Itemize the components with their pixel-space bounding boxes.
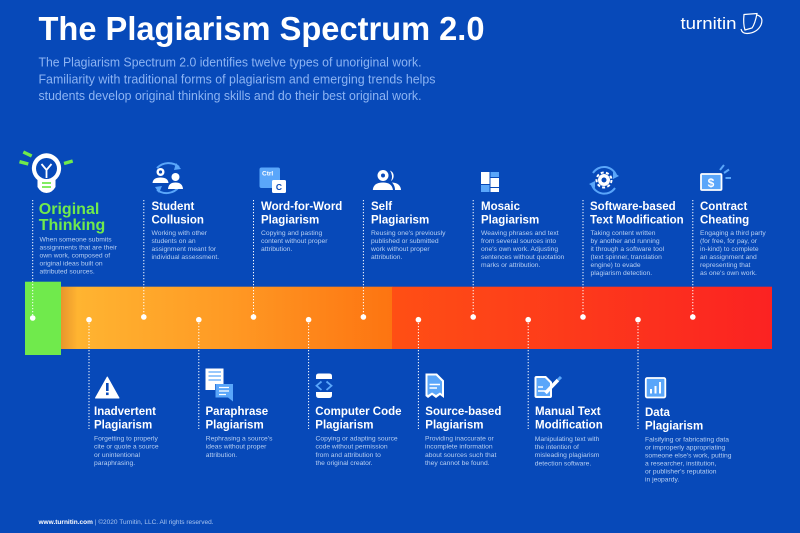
item: Contract Cheating: (for free, for pay, or xyxy=(700,238,758,245)
item: Paraphrase Plagiarism: attribution. xyxy=(206,452,237,459)
item: Computer Code Plagiarism: Computer Code xyxy=(315,406,402,418)
item: Inadvertent Plagiarism xyxy=(94,377,159,467)
icon: ctrl c keys xyxy=(260,168,286,193)
icon: phone with code brackets xyxy=(316,374,332,398)
item: Software-based Text Modification: Taking content written xyxy=(590,230,656,237)
item: Manual Text Modification: the intention of xyxy=(535,444,579,451)
item: Manual Text Modification: misleading plagiarism xyxy=(535,452,600,459)
item: Original Thinking: original ideas built on xyxy=(40,261,103,268)
item: Mosaic Plagiarism: Mosaic xyxy=(481,201,521,213)
title: The Plagiarism Spectrum 2.0 xyxy=(38,10,484,47)
item: Software-based Text Modification: (text spinner, translation xyxy=(590,254,662,261)
item: Original Thinking: Original xyxy=(39,201,99,218)
item: Data Plagiarism: Falsifying or fabricating data xyxy=(645,436,729,443)
item: Source-based Plagiarism: incomplete information xyxy=(425,444,493,451)
item: Data Plagiarism: or publisher's reputation xyxy=(645,468,717,476)
item: Computer Code Plagiarism: Plagiarism xyxy=(315,420,373,432)
intro text: The Plagiarism Spectrum 2.0 identifies twelve types of unoriginal work. xyxy=(38,56,422,70)
item: Student Collusion: students on an xyxy=(152,238,196,245)
item: Contract Cheating: in-kind) to complete xyxy=(700,246,759,253)
item: Computer Code Plagiarism xyxy=(315,374,402,467)
item: Original Thinking: assignments that are their xyxy=(40,245,118,252)
item: Paraphrase Plagiarism xyxy=(206,368,273,459)
item: Contract Cheating: as one's own work. xyxy=(700,270,757,277)
item: Source-based Plagiarism: Providing inaccurate or xyxy=(425,436,494,442)
item: Data Plagiarism: or improperly appropriating xyxy=(645,444,726,452)
item: Inadvertent Plagiarism: paraphrasing. xyxy=(94,460,135,467)
item: Data Plagiarism: Data xyxy=(645,407,671,419)
item: Student Collusion: individual assessment. xyxy=(152,254,219,261)
item: Student Collusion xyxy=(152,163,219,261)
item: Contract Cheating: Contract xyxy=(700,201,747,213)
item: Computer Code Plagiarism: the original creator. xyxy=(316,460,373,467)
item: Student Collusion: Collusion xyxy=(152,214,204,226)
intro text: Familiarity with traditional forms of plagiarism and emerging trends helps xyxy=(38,72,436,86)
item: Software-based Text Modification: it through a software tool xyxy=(590,246,665,253)
item: Contract Cheating: Cheating xyxy=(700,214,749,226)
item: Manual Text Modification: Modification xyxy=(535,420,603,432)
item: Inadvertent Plagiarism: Forgetting to properly xyxy=(94,436,159,442)
item: Manual Text Modification: Manual Text xyxy=(535,406,601,418)
item: Mosaic Plagiarism: one's own work. Adjusting xyxy=(481,246,558,253)
item: Self Plagiarism: work without proper xyxy=(370,246,430,253)
item: Data Plagiarism xyxy=(645,378,732,484)
item: Paraphrase Plagiarism: ideas without proper xyxy=(206,444,267,451)
icon: ctrl c keys: Ctrl xyxy=(262,170,273,178)
item: Paraphrase Plagiarism: Plagiarism xyxy=(206,420,264,432)
item: Original Thinking: When someone submits xyxy=(40,237,112,244)
item: Inadvertent Plagiarism: or unintentional xyxy=(94,452,140,459)
item: Contract Cheating: an assignment and xyxy=(700,254,757,261)
icon: gear with arrows xyxy=(589,167,619,194)
item: Source-based Plagiarism: about sources such that xyxy=(425,452,496,459)
item: Self Plagiarism: Reusing one's previously xyxy=(371,230,446,237)
icon: torn document xyxy=(426,374,444,398)
item: Manual Text Modification: detection software. xyxy=(535,460,591,467)
item: Source-based Plagiarism: Plagiarism xyxy=(425,420,483,432)
spectrum bar xyxy=(25,282,772,355)
item: Self Plagiarism xyxy=(370,170,446,261)
item: Mosaic Plagiarism xyxy=(481,172,565,269)
item: Word-for-Word Plagiarism: Plagiarism xyxy=(261,214,319,226)
icon: mosaic tiles xyxy=(481,172,499,192)
item: Software-based Text Modification: Text Modification xyxy=(590,214,684,226)
item: Original Thinking: Thinking xyxy=(39,217,105,234)
item: Student Collusion: Student xyxy=(152,201,194,213)
item: Self Plagiarism: Plagiarism xyxy=(371,214,429,226)
icon: two students with arrows xyxy=(152,163,183,193)
intro text xyxy=(38,56,436,103)
footer: www.turnitin.com | ©2020 Turnitin, LLC. All rights reserved. xyxy=(38,518,214,526)
item: Student Collusion: assignment meant for xyxy=(152,246,217,253)
item: Contract Cheating: representing that xyxy=(700,262,751,269)
item: Manual Text Modification: Manipulating text with xyxy=(535,436,600,443)
item: Word-for-Word Plagiarism: attribution. xyxy=(261,246,293,253)
item: Software-based Text Modification: plagiarism detection. xyxy=(590,270,652,277)
icon: light bulb xyxy=(20,152,73,193)
item: Original Thinking xyxy=(20,152,118,276)
item: Inadvertent Plagiarism: cite or quote a source xyxy=(94,444,159,451)
item: Source-based Plagiarism: Source-based xyxy=(425,406,501,418)
turnitin logo xyxy=(680,14,762,34)
turnitin logo: turnitin xyxy=(680,15,736,33)
item: Word-for-Word Plagiarism: Copying and pasting xyxy=(261,230,323,237)
item: Mosaic Plagiarism: Weaving phrases and text xyxy=(481,230,559,237)
item: Inadvertent Plagiarism: Plagiarism xyxy=(94,420,152,432)
item: Self Plagiarism: published or submitted xyxy=(371,238,439,245)
icon: document and speech bubble xyxy=(206,368,233,402)
item: Mosaic Plagiarism: from several sources into xyxy=(481,238,556,245)
item: Software-based Text Modification: by another and running xyxy=(590,238,660,245)
item: Software-based Text Modification: Software-based xyxy=(590,201,676,213)
icon: person with shadow xyxy=(373,170,401,190)
item: Manual Text Modification xyxy=(534,376,603,467)
item: Word-for-Word Plagiarism: content without proper xyxy=(261,238,328,245)
item: Software-based Text Modification: engine) to evade xyxy=(590,262,641,269)
item: Source-based Plagiarism xyxy=(425,374,501,467)
item: Data Plagiarism: Plagiarism xyxy=(645,420,703,432)
item: Mosaic Plagiarism: sentences without quotation xyxy=(481,254,565,261)
item: Mosaic Plagiarism: marks or attribution. xyxy=(481,262,541,269)
item: Word-for-Word Plagiarism xyxy=(260,168,342,253)
icon: money on screen: $ xyxy=(708,176,715,190)
item: Data Plagiarism: in jeopardy. xyxy=(645,476,679,484)
intro text: students develop original thinking skills and do their best original work. xyxy=(38,89,422,103)
item: Computer Code Plagiarism: Copying or adapting source xyxy=(316,436,398,442)
icon: ctrl c keys: C xyxy=(276,182,282,192)
item: Paraphrase Plagiarism: Rephrasing a source's xyxy=(206,436,273,442)
item: Data Plagiarism: someone else's work, putting xyxy=(645,452,732,460)
icon: document with pencil xyxy=(534,376,561,398)
item: Self Plagiarism: attribution. xyxy=(371,254,403,261)
item: Data Plagiarism: a researcher, institution, xyxy=(645,460,716,468)
connector lines and dots xyxy=(30,200,696,429)
item: Mosaic Plagiarism: Plagiarism xyxy=(481,214,539,226)
item: Original Thinking: attributed sources. xyxy=(40,269,95,276)
item: Source-based Plagiarism: they cannot be found. xyxy=(425,460,490,467)
item: Paraphrase Plagiarism: Paraphrase xyxy=(206,406,268,418)
item: Inadvertent Plagiarism: Inadvertent xyxy=(94,406,156,418)
item: Original Thinking: own work, composed of xyxy=(40,253,110,260)
item: Software-based Text Modification xyxy=(589,167,684,277)
item: Computer Code Plagiarism: code without permission xyxy=(316,444,388,451)
item: Contract Cheating: Engaging a third party xyxy=(700,230,766,237)
item: Word-for-Word Plagiarism: Word-for-Word xyxy=(261,201,342,213)
item: Student Collusion: Working with other xyxy=(152,230,208,237)
item: Self Plagiarism: Self xyxy=(371,201,392,213)
icon: warning triangle xyxy=(96,377,119,398)
item: Computer Code Plagiarism: from and attribution to xyxy=(316,452,381,459)
item: Contract Cheating xyxy=(700,165,766,277)
icon: bar chart xyxy=(646,378,665,398)
